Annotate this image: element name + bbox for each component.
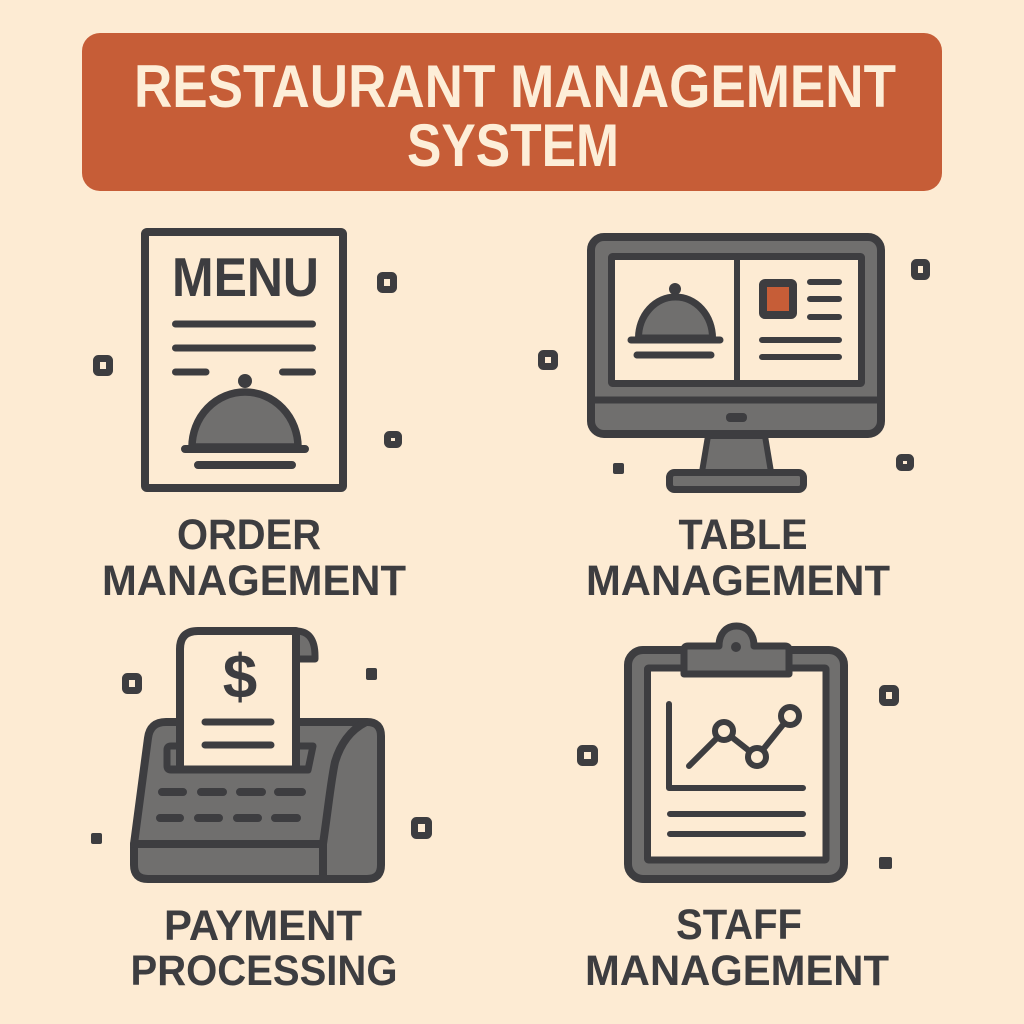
label: payment processing: PROCESSING [130, 947, 398, 995]
title banner: RESTAURANT MANAGEMENT [134, 53, 896, 120]
title banner [82, 33, 942, 191]
icon: menu [145, 232, 343, 488]
label: staff management: MANAGEMENT [585, 947, 889, 995]
label: payment processing [130, 902, 398, 995]
icon: clipboard with chart [628, 626, 844, 879]
label: table management [586, 511, 890, 605]
label: table management: TABLE [678, 511, 808, 559]
label: payment processing: PAYMENT [164, 902, 362, 950]
menu heading: MENU [172, 246, 319, 308]
icon: cash register with receipt: $ [223, 643, 257, 712]
decorative squares [91, 262, 926, 869]
label: staff management [585, 901, 889, 995]
label: order management: MANAGEMENT [102, 557, 406, 605]
icon: cash register with receipt [134, 631, 381, 879]
label: table management: MANAGEMENT [586, 557, 890, 605]
icon: monitor [591, 237, 881, 490]
label: order management [102, 511, 406, 605]
label: order management: ORDER [177, 511, 321, 559]
label: staff management: STAFF [676, 901, 802, 949]
title banner: SYSTEM [407, 112, 619, 179]
